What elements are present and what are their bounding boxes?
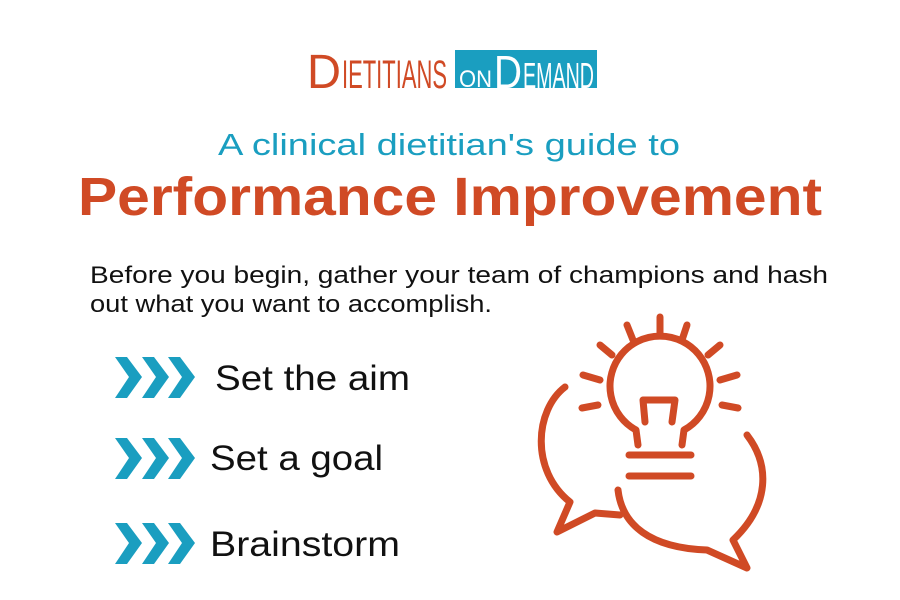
logo <box>307 46 597 99</box>
intro text: Before you begin, gather your team of champions and hash <box>90 262 828 289</box>
logo: ON <box>459 66 492 93</box>
title: Performance Improvement <box>78 167 822 227</box>
icon: lightbulb with speech bubbles <box>541 317 763 568</box>
step: set a goal: Set a goal <box>210 439 383 478</box>
logo: D <box>307 46 341 99</box>
step: set the aim <box>115 357 410 398</box>
logo: IETITIANS <box>342 53 447 97</box>
step: brainstorm: Brainstorm <box>210 525 400 564</box>
step: set the aim: Set the aim <box>215 359 410 398</box>
step: set a goal <box>115 438 383 479</box>
subtitle: A clinical dietitian's guide to <box>218 127 680 162</box>
logo: D <box>494 46 522 98</box>
step: brainstorm <box>115 523 400 564</box>
intro text <box>90 262 828 318</box>
intro text: out what you want to accomplish. <box>90 291 492 318</box>
logo: EMAND <box>523 55 594 96</box>
